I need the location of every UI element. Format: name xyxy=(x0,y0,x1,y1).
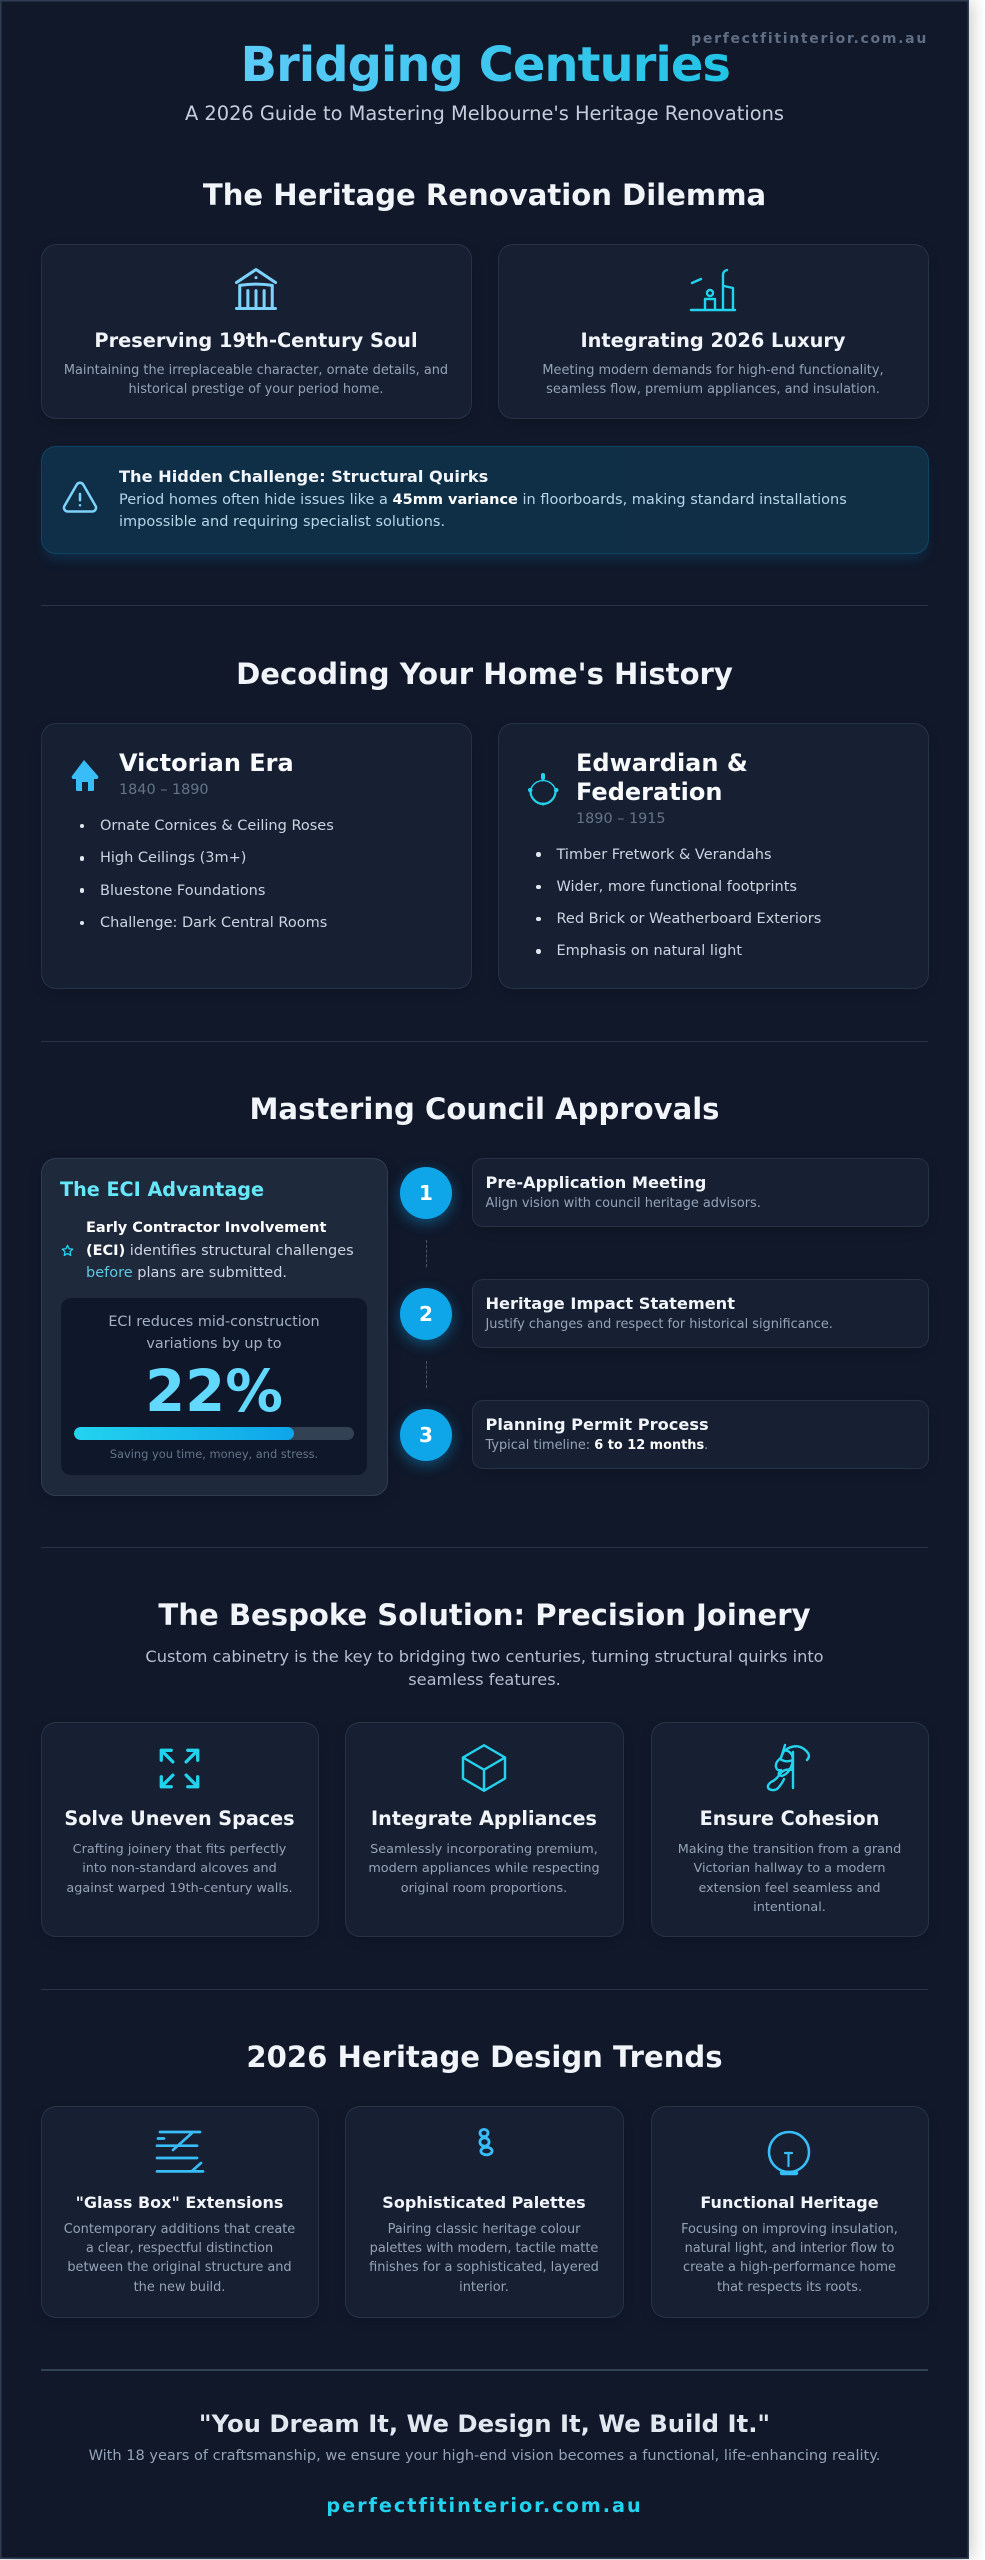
stat lead text: variations by up to xyxy=(146,1336,282,1352)
card text: original room proportions. xyxy=(401,1881,567,1896)
card text: historical prestige of your period home. xyxy=(128,382,384,397)
card text: between the original structure and xyxy=(67,2260,292,2275)
panel heading: The ECI Advantage xyxy=(60,1178,264,1201)
step number 1: 1 xyxy=(419,1181,433,1205)
card text: Seamlessly incorporating premium, xyxy=(370,1842,598,1857)
feature list xyxy=(536,846,821,959)
card text: Meeting modern demands for high-end functionality, xyxy=(542,363,884,378)
panel: preserving soul xyxy=(40,244,472,419)
callout: hidden challenge xyxy=(40,446,928,554)
step text: Align vision with council heritage advisors. xyxy=(486,1196,761,1211)
step 3 card xyxy=(472,1400,928,1469)
title: Bridging Centuries xyxy=(240,37,730,93)
icon: house xyxy=(72,760,98,791)
heading: bespoke solution: The Bespoke Solution: Precision Joinery xyxy=(158,1598,811,1632)
eci explanation: (ECI) identifies structural challenges xyxy=(86,1243,354,1259)
era years: 1890 – 1915 xyxy=(576,811,666,827)
feature list xyxy=(80,818,334,931)
icon: cube xyxy=(462,1744,506,1792)
icon: glass box lines xyxy=(156,2130,204,2173)
eci explanation: Early Contractor Involvement xyxy=(86,1220,326,1236)
panel: edwardian federation xyxy=(498,723,928,989)
step text: Justify changes and respect for historical significance. xyxy=(486,1317,833,1332)
card text: against warped 19th-century walls. xyxy=(66,1881,293,1896)
card title: Ensure Cohesion xyxy=(700,1807,879,1830)
callout text xyxy=(119,492,847,530)
era title xyxy=(576,749,748,806)
icon: heritage building xyxy=(234,268,278,310)
card title: "Glass Box" Extensions xyxy=(76,2192,283,2212)
section intro xyxy=(145,1647,824,1689)
feature list: Timber Fretwork & Verandahs xyxy=(556,846,772,862)
panel: eci advantage xyxy=(40,1158,388,1496)
feature list: High Ceilings (3m+) xyxy=(100,850,246,866)
feature list: Emphasis on natural light xyxy=(556,943,742,959)
card title: Integrate Appliances xyxy=(371,1807,597,1830)
step title: Pre-Application Meeting xyxy=(486,1172,706,1192)
card title: Sophisticated Palettes xyxy=(382,2192,586,2212)
step title: Heritage Impact Statement xyxy=(486,1294,735,1312)
step number 2: 2 xyxy=(419,1302,433,1326)
callout text: impossible and requiring specialist solutions. xyxy=(119,514,445,530)
card text: modern appliances while respecting xyxy=(368,1861,600,1876)
card text: extension feel seamless and xyxy=(698,1881,881,1896)
closing text: With 18 years of craftsmanship, we ensure your high-end vision becomes a functional, life-enhancing reality. xyxy=(89,2447,880,2464)
heading: dilemma: The Heritage Renovation Dilemma xyxy=(203,178,766,212)
card text xyxy=(369,2222,599,2295)
card text: seamless flow, premium appliances, and insulation. xyxy=(546,382,880,397)
panel: sophisticated palettes xyxy=(344,2106,624,2318)
card text: finishes for a sophisticated, layered xyxy=(369,2260,599,2275)
panel: victorian era xyxy=(40,723,472,989)
step 2 card xyxy=(472,1279,928,1348)
feature list: Ornate Cornices & Ceiling Roses xyxy=(100,818,334,834)
card text: Pairing classic heritage colour xyxy=(388,2222,580,2237)
panel: functional heritage xyxy=(650,2106,928,2318)
callout title: The Hidden Challenge: Structural Quirks xyxy=(119,467,488,486)
card text: palettes with modern, tactile matte xyxy=(370,2241,598,2256)
icon: brush squiggle xyxy=(766,1744,810,1792)
era years: 1840 – 1890 xyxy=(119,782,209,798)
step 1 card xyxy=(472,1158,928,1227)
card text xyxy=(66,1842,293,1896)
feature list: Bluestone Foundations xyxy=(100,883,265,899)
card text: Crafting joinery that fits perfectly xyxy=(73,1842,286,1857)
step number 3 xyxy=(400,1409,452,1461)
step number 2 xyxy=(400,1288,452,1340)
icon: light bulb xyxy=(768,2130,810,2176)
feature list: Wider, more functional footprints xyxy=(556,879,797,895)
icon: compass ring xyxy=(528,773,558,806)
card text xyxy=(678,1842,901,1915)
heading: council approvals: Mastering Council Approvals xyxy=(249,1092,720,1126)
icon: modern skyline xyxy=(690,268,736,312)
step number 3: 3 xyxy=(419,1423,433,1447)
step title: Planning Permit Process xyxy=(486,1414,709,1434)
watermark url: perfectfitinterior.com.au xyxy=(691,30,928,46)
footer url: perfectfitinterior.com.au xyxy=(326,2494,643,2517)
panel: solve uneven spaces xyxy=(40,1722,318,1937)
stat caption: Saving you time, money, and stress. xyxy=(110,1447,318,1461)
card title: Functional Heritage xyxy=(700,2192,879,2212)
stat value: 22% xyxy=(145,1358,283,1425)
icon: warning triangle xyxy=(62,482,98,513)
card text: into non-standard alcoves and xyxy=(82,1861,277,1876)
feature list: Red Brick or Weatherboard Exteriors xyxy=(556,911,821,927)
card text: Focusing on improving insulation, xyxy=(681,2222,898,2237)
heading: design trends: 2026 Heritage Design Trends xyxy=(246,2040,723,2074)
card text xyxy=(542,363,884,397)
progress bar xyxy=(74,1427,354,1440)
icon: star xyxy=(62,1244,74,1256)
section intro: seamless features. xyxy=(408,1670,561,1689)
eci explanation: before plans are submitted. xyxy=(86,1265,287,1281)
step text: Typical timeline: 6 to 12 months. xyxy=(486,1438,708,1453)
card text: natural light, and interior flow to xyxy=(685,2241,894,2256)
heading: history: Decoding Your Home's History xyxy=(236,657,733,691)
card text xyxy=(64,2222,295,2295)
card text: create a high-performance home xyxy=(683,2260,896,2275)
card text xyxy=(681,2222,898,2295)
panel: integrate appliances xyxy=(344,1722,624,1937)
panel: integrating luxury xyxy=(498,244,928,419)
icon: palette swatches xyxy=(478,2128,494,2156)
era title: Victorian Era xyxy=(119,749,294,777)
era title: Federation xyxy=(576,778,722,806)
section intro: Custom cabinetry is the key to bridging two centuries, turning structural quirks into xyxy=(145,1647,824,1666)
card text: Contemporary additions that create xyxy=(64,2222,295,2237)
card title: Integrating 2026 Luxury xyxy=(580,329,846,352)
stat lead text: ECI reduces mid-construction xyxy=(108,1314,320,1330)
card text: that respects its roots. xyxy=(717,2280,862,2295)
card text: the new build. xyxy=(134,2280,225,2295)
card title: Preserving 19th-Century Soul xyxy=(94,329,418,352)
panel: ensure cohesion xyxy=(650,1722,928,1937)
panel: glass box xyxy=(40,2106,318,2318)
subtitle: A 2026 Guide to Mastering Melbourne's Heritage Renovations xyxy=(185,102,784,125)
eci explanation xyxy=(86,1220,354,1281)
icon: expand arrows xyxy=(160,1748,200,1788)
card text: Making the transition from a grand xyxy=(678,1842,901,1857)
card text: Victorian hallway to a modern xyxy=(693,1861,886,1876)
closing quote: "You Dream It, We Design It, We Build It." xyxy=(199,2409,770,2438)
era title: Edwardian & xyxy=(576,749,748,777)
card text xyxy=(64,363,448,397)
callout text: Period homes often hide issues like a 45mm variance in floorboards, making standard installations xyxy=(119,492,847,508)
stat box xyxy=(61,1298,367,1475)
feature list: Challenge: Dark Central Rooms xyxy=(100,915,327,931)
card text: intentional. xyxy=(753,1900,826,1915)
card text xyxy=(368,1842,600,1896)
card text: a clear, respectful distinction xyxy=(86,2241,273,2256)
card title: Solve Uneven Spaces xyxy=(64,1807,295,1830)
card text: Maintaining the irreplaceable character, ornate details, and xyxy=(64,363,448,378)
card text: interior. xyxy=(459,2280,509,2295)
stat lead text xyxy=(108,1314,320,1352)
step number 1 xyxy=(400,1167,452,1219)
